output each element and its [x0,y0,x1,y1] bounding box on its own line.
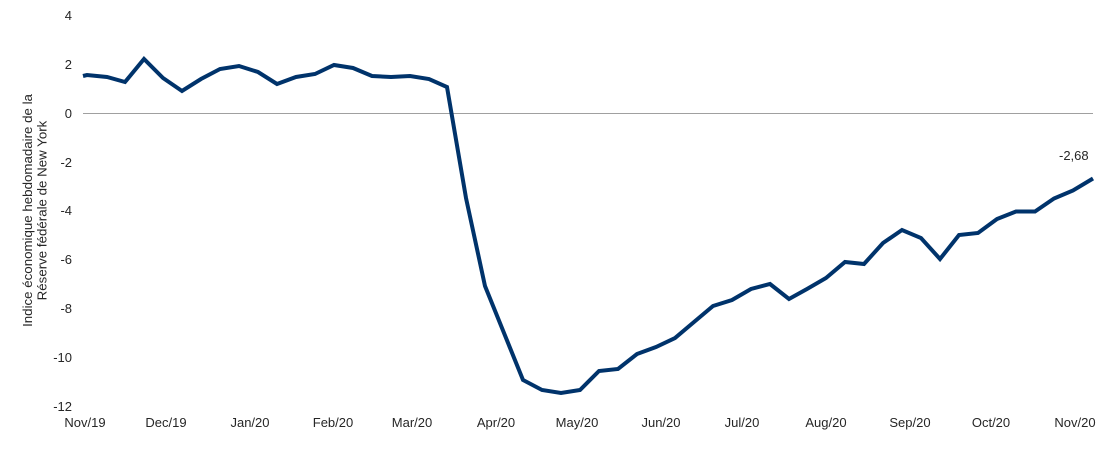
x axis date labels: Nov/20 [1054,415,1096,430]
y axis title: Indice économique hebdomadaire de la [20,93,35,327]
y axis tick labels: -10 [53,350,72,365]
x axis date labels: Oct/20 [972,415,1010,430]
x axis date labels: Feb/20 [313,415,353,430]
y axis tick labels: 4 [65,8,72,23]
y axis tick labels: -6 [60,252,72,267]
x axis date labels: Jul/20 [725,415,759,430]
x axis date labels: Nov/19 [64,415,106,430]
x axis date labels: Jan/20 [230,415,270,430]
x axis date labels [64,415,1096,430]
index data line [83,59,1093,393]
x axis date labels: Mar/20 [392,415,432,430]
y axis tick labels: 2 [65,57,72,72]
x axis date labels: Aug/20 [805,415,847,430]
x axis date labels: Sep/20 [889,415,931,430]
y axis tick labels: -8 [60,301,72,316]
y axis tick labels: -12 [53,399,72,414]
y axis title [20,93,50,327]
zero line [83,112,1093,114]
y axis tick labels: -4 [60,203,72,218]
x axis date labels: May/20 [556,415,598,430]
y axis tick labels [53,8,72,414]
x axis date labels: Dec/19 [145,415,187,430]
x axis date labels: Jun/20 [641,415,681,430]
y axis tick labels: 0 [65,106,72,121]
y axis title: Réserve fédérale de New York [34,120,50,300]
x axis date labels: Apr/20 [477,415,515,430]
y axis tick labels: -2 [60,155,72,170]
latest value label: -2,68 [1059,148,1089,163]
